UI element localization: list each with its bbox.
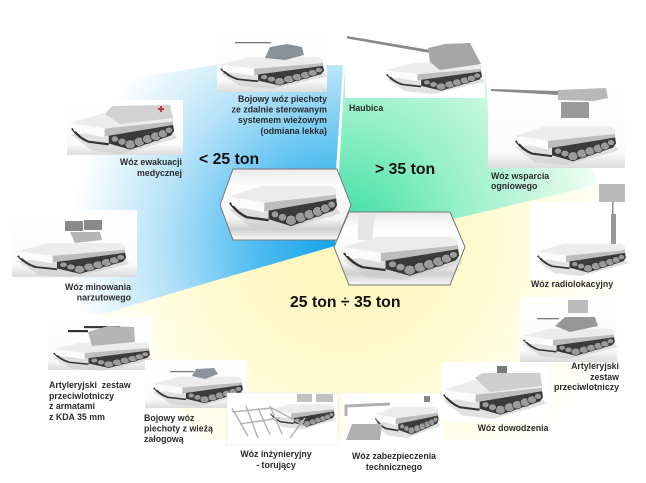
label: infantry fighting vehicle light: (odmiana lekka) bbox=[260, 126, 327, 136]
label: anti-aircraft radar: przeciwlotniczy bbox=[554, 382, 619, 392]
vehicle: fire support bbox=[488, 85, 625, 168]
label: fire support: Wóz wsparcia bbox=[491, 171, 549, 181]
label: infantry fighting vehicle with turret: załogową bbox=[144, 434, 184, 444]
label: technical support: Wóz zabezpieczenia bbox=[352, 451, 436, 461]
label: mine laying: narzutowego bbox=[77, 292, 132, 302]
label: infantry fighting vehicle light: Bojowy wóz piechoty bbox=[238, 94, 327, 104]
vehicle: infantry fighting vehicle with crewed turret bbox=[145, 360, 247, 408]
vehicle: infantry fighting vehicle, light variant bbox=[217, 30, 327, 92]
label: infantry fighting vehicle light: systemem wieżowym bbox=[238, 115, 327, 125]
label: mine laying: Wóz minowania bbox=[65, 282, 131, 292]
label: anti-aircraft cannons: z armatami bbox=[49, 401, 95, 411]
hexagon: base vehicle under 25 ton bbox=[220, 169, 351, 240]
vehicle: technical support bbox=[342, 393, 443, 445]
vehicle: mine laying bbox=[12, 210, 137, 278]
vehicle: medical evacuation bbox=[67, 100, 183, 155]
label: anti-aircraft cannons: Artyleryjski zestaw bbox=[49, 380, 131, 390]
label: anti-aircraft cannons: z KDA 35 mm bbox=[49, 412, 105, 422]
vehicle: command bbox=[442, 362, 550, 422]
label: engineering: - torujący bbox=[256, 460, 296, 470]
weight heading: under 25 ton: < 25 ton bbox=[199, 151, 259, 168]
weight heading: 25 to 35 ton: 25 ton ÷ 35 ton bbox=[290, 294, 400, 311]
label: medical evacuation: Wóz ewakuacji bbox=[120, 157, 182, 167]
label: medical evacuation: medycznej bbox=[137, 168, 182, 178]
vehicle: anti-aircraft system with 35 mm cannons bbox=[48, 317, 153, 371]
vehicle: radar bbox=[530, 184, 638, 280]
background sector: over 35 ton (green) bbox=[335, 65, 597, 246]
label: infantry fighting vehicle with turret: piechoty z wieżą bbox=[144, 424, 213, 434]
weight heading: over 35 ton: > 35 ton bbox=[375, 161, 435, 178]
label: fire support: ogniowego bbox=[491, 181, 538, 191]
label: anti-aircraft radar: Artyleryjski bbox=[571, 361, 619, 371]
label: anti-aircraft radar: zestaw bbox=[590, 372, 619, 382]
label: howitzer: Haubica bbox=[349, 103, 383, 113]
label: infantry fighting vehicle with turret: Bojowy wóz bbox=[144, 413, 195, 423]
label: radar: Wóz radiolokacyjny bbox=[531, 279, 613, 289]
background sector: under 25 ton (blue) bbox=[60, 65, 343, 315]
label: technical support: technicznego bbox=[366, 462, 423, 472]
background sector: 25 to 35 ton (yellow) bbox=[100, 185, 646, 440]
hexagon: base vehicle 25 to 35 ton bbox=[334, 212, 465, 285]
vehicle: engineering mine-clearing bbox=[227, 393, 338, 445]
label: infantry fighting vehicle light: ze zdalnie sterowanym bbox=[232, 104, 327, 114]
vehicle: howitzer bbox=[345, 28, 485, 98]
label: command: Wóz dowodzenia bbox=[478, 423, 549, 433]
label: engineering: Wóz inżynieryjny bbox=[240, 449, 312, 459]
vehicle: anti-aircraft system with radar bbox=[520, 297, 618, 362]
label: anti-aircraft cannons: przeciwlotniczy bbox=[49, 391, 114, 401]
